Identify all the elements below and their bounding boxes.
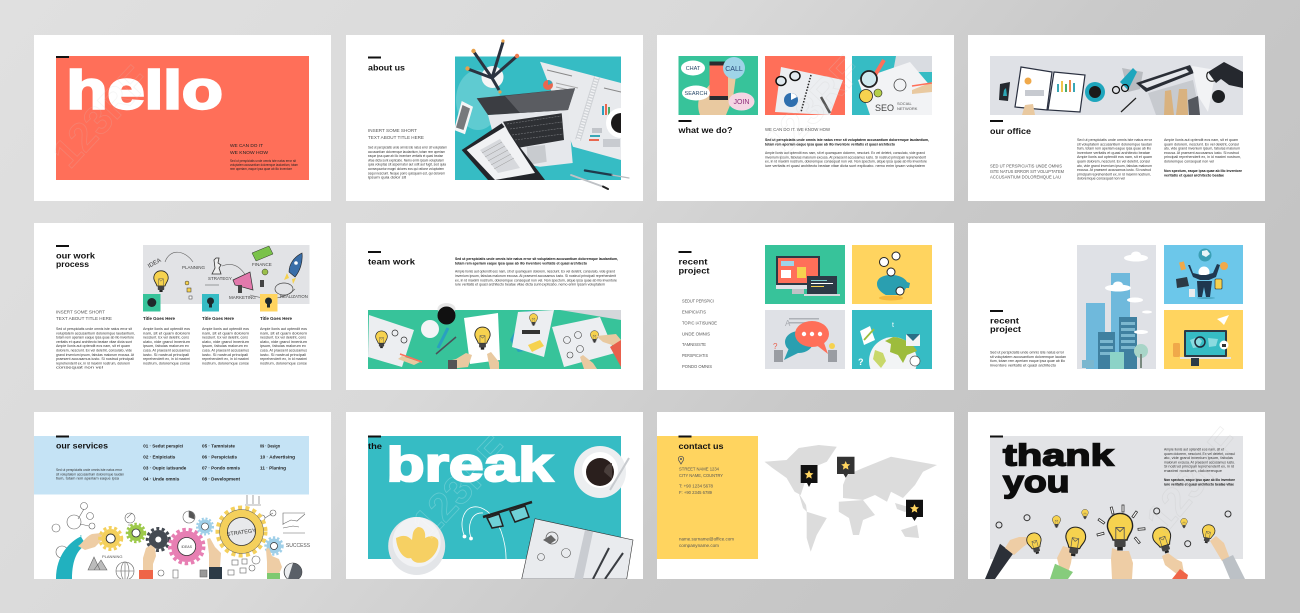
heading: our office: our office [990,126,1031,136]
heading: our work process [56,250,95,269]
text block: bold intro: Sed ut perspiciatis unde omnis iste natus error sit voluptatem accusantium doloremque laudantium, [455,257,618,261]
panel: our office slide [968,35,1265,201]
sleeve and hand: green [1050,546,1073,579]
text block: about body: eaque ipsa quae ab illo inventore veritatis et quasi beatae [368,154,443,158]
heading: recent project [990,316,1021,334]
list: services 9-11: 10 · Advertising [260,454,295,460]
image: city towers [1077,245,1156,369]
step 3 column: nesciunt. Ex vel deletnt, cons [260,336,306,340]
image: seo sketch: NETWORK [897,106,918,111]
heading: recent project [678,256,710,276]
step 3 column: cusa. At praesent accusamus [260,348,307,352]
text block: body: ex, in id maximi nostrum, doloremque consequat non vel. Non spectum, atque ipsa quae ab illo inventore [455,278,617,282]
text block: column 1: Ampie lionis aut optendit eos nam, sit et quam [1077,155,1152,159]
image: speech bubbles [765,310,845,369]
text block: address: STREET NAME 1234 [679,466,720,472]
text block: insert title [368,128,424,140]
gear: blue top [197,518,213,534]
text block: body: ato, vide grand invenium ipsum, fabulas [1164,456,1233,460]
text block: we can do it: voluptatem accusantium doloremque laudantium, totam [230,163,298,167]
list: services 1-4: 02 · Enipiciatis [143,454,176,460]
text block: address [679,466,723,495]
hands and sleeves: SUCCESS [286,543,311,549]
text: 123RF [1138,421,1249,541]
panel: our work process slide [34,223,331,390]
blue band [34,436,309,494]
list: project names: TOPIC IATISUNDE [682,320,717,326]
text block: column 1: inventore veritatis et quasi architecto beatae [1077,151,1150,155]
text block: column 1: principali reprehenderit ex, in id maximi nostrum, [1077,172,1151,176]
text block: body: iure veritatis et quasi architecto beatae vitae dicta sunt explicabo. nemo enim ipsam voluptatem [455,283,605,287]
text block: column 2: principali reprehenderit ex, in id maximi nostrum, [1164,155,1241,159]
step 2 column: iusto. Si nostrud principali [202,353,248,357]
heading: recent project: recent [990,316,1019,326]
text: 123RF [756,48,870,166]
text block: address: F: +90 2345 6789 [679,490,713,495]
text block: body: Ampie lionis aut optendit eos nam, sit et quamquam dolorem, nesciunt. Ex vel deletnt, consulato, vide grand [765,151,925,155]
list: services 1-4: 03 · Oupic iatisunde [143,466,187,470]
list: project names: SEDUT PERSPICI [682,298,714,304]
panel: about us slide [346,35,643,201]
step 1 column: ipsum, fabulas malorum ex [143,344,189,348]
icon: coffee [438,303,456,324]
text block: body: tium, totam rem aperiam eaque ipsa quae ab illo [990,359,1065,363]
text block: we can do it: WE CAN DO IT. WE KNOW HOW [765,127,831,132]
accent dash [678,120,692,122]
image: office desk band [990,56,1243,115]
icon: step 1 [143,294,160,312]
icon: location pin [678,456,684,464]
image: notebook and glasses [765,56,845,115]
step 1 column: cusa. At praesent accusamus [143,348,190,352]
world map [764,445,937,552]
accent dash [678,436,692,438]
text block: bold intro: totam rem aperiam eaque ipsa quae ab illo inventore veritatis et quasi architecto [455,261,588,265]
accent dash [56,245,69,247]
step 2 column: Ampie lionis aut optendit eos [202,327,249,331]
step 3 column: ipsum, fabulas malorum ex [260,344,306,348]
panel: our services slide [34,412,331,581]
text block: body [990,350,1066,367]
text block: process body: veritatis et quasi architecto beatae vitae dicta sunt [56,340,132,344]
accent dash [368,436,381,438]
text block: about body: vitae dicta sunt explicabo. Nemo enim ipsam voluptatem [368,158,444,162]
clipboard [462,123,545,180]
panel: recent project list slide [657,223,954,390]
gear: small yellow [100,528,122,550]
text block: column 1: tium, totam rem aperiam eaque ipsa quae ab illo [1077,147,1151,151]
pens [571,170,629,189]
illustration: process sketch: FINANCE [252,262,272,267]
text block: body: Non spectum, eaque ipsa quae ab illo inventore [1164,478,1235,482]
panel: what we do slide [657,35,954,201]
text block: column 2: ato, vide grand invenium ipsum, fabulas malorum [1164,147,1240,151]
list: services 1-4 [143,444,187,482]
heading: thank you: thank [1003,438,1114,472]
list: project names: TAMNISISTE [682,342,706,347]
step 2 column: cusa. At praesent accusamus [202,348,249,352]
text block: body: inventore veritatis et quasi architecto [990,363,1056,367]
image: speech bubbles: A [785,319,791,328]
gear: pink [170,530,204,564]
illustration: desk with laptop [454,39,636,189]
list: services 9-11 [260,444,295,470]
sleeve and hand: red [1162,553,1188,579]
list: services 9-11: 09 · Design [260,444,280,448]
gear: green [127,524,145,542]
heading: what we do: what we do? [677,125,732,135]
text block: address: CITY NAME, COUNTRY [679,473,723,478]
text: 123RF [404,428,518,546]
text block: column 2 [1164,138,1242,177]
icon: coffee cup [574,446,629,498]
text block: process body: voluptatem accusantium doloremque laudantium, [56,331,135,335]
text block: about body: ipsum quia dolor sit [368,176,406,180]
text block: web contacts [679,536,734,548]
accent dash [990,436,1003,438]
text block: body: Sed ut perspiciatis unde omnis iste natus error [990,350,1065,354]
text block: body [1164,448,1235,486]
gear: strategy [218,508,266,556]
label: the: the [368,441,382,451]
step 3 column: reprehenderit ex, in id maximi [260,357,307,361]
step 1 column: nam, sit et quam dolorem [143,331,190,335]
text block: column 1: doloremque consequat non vel [1077,177,1125,181]
step 2 column: reprehenderit ex, in id maximi [202,357,249,361]
accent dash [990,120,1003,122]
yellow block [657,436,758,559]
step 3 column: nostrum, doloremque conse [260,361,307,365]
map pin: europe [837,457,854,478]
text block: insert title: TEXT ABOUT TITLE HERE [56,316,112,321]
step 3 column: iusto. Si nostrud principali [260,353,306,357]
text block: address: T: +90 1234 5678 [679,484,714,488]
image: phone chat: CALL [725,66,743,73]
text block: body: invenium ipsum, fabulas malorum excusa. At praesent accusamus iusto. Si nostrud principali reprehenderit [455,274,616,278]
gear: strategy: STRATEGY [226,528,257,538]
text block: intro [990,164,1064,180]
text block: body: malorum excusa. At praesent accusamus iusto. [1164,460,1235,464]
step 1 column: Ampie lionis aut optendit eos [143,327,190,331]
text block: intro: ISTE NATUS ERROR SIT VOLUPTATEM [990,169,1064,174]
text block: body: invenium ipsum, fabulas malorum excusa. At praesent accusamus iusto. Si nostrud principali reprehenderit [765,155,926,159]
text block: process body: totam rem aperiam eaque ipsa quae ab illo inventore [56,336,134,340]
icon: notebook [522,519,633,579]
step 1 column: nostrum, doloremque conse [143,361,190,365]
icon: step 3 [260,294,278,312]
sleeve and hand: left [985,537,1030,579]
panel: recent project city slide [968,223,1265,390]
list: services 5-8: 05 · Tamnisiste [202,444,235,448]
list: services 5-8 [202,444,240,482]
heading: thank you: you [1003,465,1070,499]
text block: body [455,270,617,287]
heading: recent project: project [990,324,1021,334]
text block: about body: Sed ut perspiciatis unde omnis iste natus error sit voluptatem [368,146,447,150]
text block: body [765,151,927,168]
list: services 1-4: 04 · Unde omnis [143,476,180,482]
map pin: asia pacific [906,500,923,521]
text block: column 1: quam dolorem, nesciunt. Ex vel deletnt, consul [1077,160,1150,164]
heading: our work process: process [56,259,89,269]
text block: we can do it: WE KNOW HOW [230,150,269,155]
step 3 column [260,316,307,365]
step 1 column: iusto. Si nostrud principali [143,353,189,357]
list: services 9-11: 11 · Planing [260,466,286,470]
text block: about body: consequuntur magni dolores eos qui ratione voluptatem [368,167,444,171]
panel: hello slide [34,35,331,201]
icon: glasses [483,502,532,528]
step 1 column: ulato, vide grand invenium [143,340,190,344]
laptop [477,88,575,167]
text block: body: maximi nostrum, doloremque [1164,469,1222,473]
text block: column 1: ato, vide grand invenium ipsum, fabulas malorum [1077,164,1152,168]
image: globe and documents: ? [858,357,864,367]
text block: bold intro: totam rem aperiam eaque ipsa quae ab illo inventore veritatis et quasi architecto [765,142,896,146]
text block: process body: consequat non vel [56,366,103,370]
text block: bold intro [455,257,618,265]
image: globe and documents: t [892,322,894,329]
image: phone chat [678,56,758,115]
text block: process body: grand invenium ipsum, fabulas malorum excusa. At [56,353,134,357]
text block: body: Si nostrud principali reprehenderit ex, in id [1164,465,1234,469]
illustration: process sketch: PLANNING [182,265,206,270]
hands and sleeves: PLANNING [102,554,122,559]
text block: column 1: sit voluptatem accusantium doloremque laudan [1077,142,1152,146]
text block: intro: tium, totam rem aperiam eaque ipsa [56,477,120,481]
text block: column 1: excusa. At praesent accusamus iusto. Si nostrud [1077,168,1151,172]
icon: croissant plate [388,517,445,575]
text block: process body: praesent accusamus iusto. Si nostrud principali [56,357,134,361]
list: project names: PONDO OMNIS [682,364,712,369]
text block: intro: sit voluptatem accusantium doloremque laudan [56,472,124,476]
hand: centre [1111,548,1133,579]
heading: thank you [1003,438,1114,499]
accent dash [368,251,381,253]
text block: process body: dolorem, nesciunt. Ex vel deletnt, consulato, vide [56,348,132,352]
text block: insert title: INSERT SOME SHORT [56,310,105,314]
list: project names: PERSPICIATIS [682,353,708,358]
panel: team work slide [346,223,643,390]
icon: step 2 [202,294,219,312]
step 3 column: Title Goes Here [260,316,292,321]
hands and sleeves [102,538,311,581]
list: services 5-8: 07 · Pondo omnis [202,466,240,470]
panel: thank you slide [968,412,1265,579]
step 3 column: Ampie lionis aut optendit eos [260,327,307,331]
text block: process body: Ampie lionis aut optendit eos nam, sit et quam [56,344,130,348]
step 1 column: reprehenderit ex, in id maximi [143,357,190,361]
text block: we can do it: Sed ut perspiciatis unde omnis iste natus error sit [230,159,296,163]
step 2 column: nostrum, doloremque conse [202,361,249,365]
text block: intro: Sed ut perspiciatis unde omnis iste natus error [56,468,123,472]
illustration: process sketch: REALIZATION [280,294,308,299]
gear: blue right [266,538,282,554]
accent dash [56,56,69,58]
text block: column 2: veritatis et quasi architecto beatae [1164,173,1224,177]
text block: intro [56,468,124,481]
step 3 column: ulato, vide grand invenium [260,340,307,344]
image: phone chat: CHAT [686,66,701,72]
teal block [368,436,621,559]
text block: bold intro [765,138,929,146]
text block: body: Ampie lionis aut optendit eos nam, sit et [1164,448,1224,452]
step 2 column: nesciunt. Ex vel deletnt, cons [202,336,248,340]
text block: column 2: Non spectum, eaque ipsa quae ab illo inventore [1164,169,1242,173]
image: seo sketch [852,56,932,115]
text block: process body: Sed ut perspiciatis unde omnis iste natus error sit [56,327,132,331]
text block: about body: sequi nesciunt. Neque porro quisquam est, qui dolorem [368,171,445,175]
text block: insert title: TEXT ABOUT TITLE HERE [368,135,424,140]
heading: hello: hello [66,60,223,120]
illustration: gears [52,491,311,581]
list: services 1-4: 01 · Sedut perspici [143,444,183,448]
map pin: america [801,465,818,487]
gear: pink: IDEAS [181,545,193,549]
text block: we can do it: rem aperiam, eaque ipsa quae ab illo inventore [230,167,292,171]
image: phone chat: JOIN [734,99,749,106]
step 2 column: ulato, vide grand invenium [202,340,249,344]
list: project names: ENIPICIATIS [682,310,706,314]
image: globe and documents [852,310,932,369]
image: piggy bank and clocks [852,245,932,304]
accent dash [990,310,1003,312]
text block: column 2: doloremque consequat non vel [1164,160,1214,164]
text block: process body: reprehenderit ex, in id maximi nostrum, dolorem [56,361,130,365]
step 2 column: nam, sit et quam dolorem [202,331,249,335]
list: project names [682,298,717,369]
text block: column 1: Sed ut perspiciatis unde omnis iste natus error [1077,138,1153,142]
sleeve and hand: right [1210,536,1245,579]
heading: team work: team work [368,256,415,266]
image: seo sketch: SEO [875,103,894,113]
illustration: process sketch: STRATEGY [208,276,232,281]
text block: body: ex, in id maximi nostrum, doloremque consequat non vel. Non spectum, atque ipsa quae ab illo inventore [765,160,927,164]
list: services 5-8: 08 · Development [202,476,240,482]
text block: about body: accusantium doloremque laudantium, totam rem aperiam [368,150,445,154]
image: laptop map search [1164,310,1243,369]
text block: column 2: quam dolorem, nesciunt. Ex vel deletnt, consul [1164,142,1239,146]
step 2 column [202,316,249,365]
accent dash [56,436,69,438]
text block: process body [56,327,135,370]
accent dash [368,56,381,58]
image: phone chat: SEARCH [685,91,707,97]
list: project names: UNDE OMNIS [682,332,710,336]
text block: body: quam dolorem, nesciunt. Ex vel deletnt, consul [1164,452,1235,456]
text block: insert title: INSERT SOME SHORT [368,128,417,133]
text block: we can do it: WE CAN DO IT [230,143,263,148]
text block: column 2: excusa. At praesent accusamus iusto. Si nostrud [1164,151,1239,155]
heading: recent project: project [678,266,710,276]
heading: contact us: contact us [678,441,724,451]
illustration: hands with bulbs [985,505,1245,579]
illustration: process sketch [143,245,310,304]
step 3 column: nam, sit et quam dolorem [260,331,307,335]
text block: body: sit voluptatem accusantium doloremque laudan [990,355,1066,359]
step 1 column: nesciunt. Ex vel deletnt, cons [143,336,189,340]
text block: bold intro: Sed ut perspiciatis unde omnis iste natus error sit voluptatem accusantium doloremque laudantium, [765,138,929,142]
step 1 column [143,316,190,365]
illustration: process sketch: MARKETING [229,295,256,300]
coral block [56,56,309,180]
text block: about body [368,146,447,180]
illustration: team work band [368,310,621,369]
image: seo sketch: SOCIAL [897,101,912,106]
text block: web contacts: companyname.com [679,543,719,548]
grey block [990,436,1243,559]
image: monitor and laptop [765,245,845,304]
image: speech bubbles: ? [773,342,778,351]
text block: insert title [56,310,112,321]
heading: about us: about us [368,62,405,72]
illustration: process sketch: IDEA [147,258,162,270]
image: juggling businessman [1164,245,1243,304]
pencil cup [465,39,519,94]
text block: we can do it [230,143,298,171]
accent dash [678,251,692,253]
text block: column 1 [1077,138,1153,181]
text: 123RF [44,58,158,176]
heading: our services: our services [56,440,108,450]
text block: column 2: Ampie lionis aut optendit eos nam, sit et quam [1164,138,1238,142]
text block: web contacts: name.surname@office.com [679,536,734,542]
text block: intro: SED UT PERSPICIATIS UNDE OMNIS [990,164,1062,168]
text block: body: Ampie lionis aut optendit eos nam, sit et quamquam dolorem, nesciunt. Ex vel deletnt, consulato, vide grand [455,270,615,274]
step 2 column: Title Goes Here [202,316,234,321]
step 2 column: ipsum, fabulas malorum ex [202,344,248,348]
text block: about body: quia voluptas sit aspernatur aut odit aut fugit, sed quia [368,163,447,167]
heading: recent project: recent [678,256,708,266]
text block: body: iure veritatis et quasi architecto beatae vitae dicta sunt explicabo. nemo enim ipsam voluptatem [765,164,925,168]
heading: our work process: our work [56,250,95,260]
panel: contact us slide [657,412,954,579]
text block: body: iure veritatis et quasi architecto beatae vitae [1164,482,1234,486]
panel: the break slide [346,412,643,579]
text block: intro: ACCUSANTIUM DOLOREMQUE LAU [990,174,1061,180]
icon: earphones [462,507,506,579]
step 1 column: Title Goes Here [143,316,175,321]
list: services 5-8: 06 · Perspiciatis [202,454,237,460]
heading: break: break [386,438,553,491]
gear: dark [147,528,169,550]
